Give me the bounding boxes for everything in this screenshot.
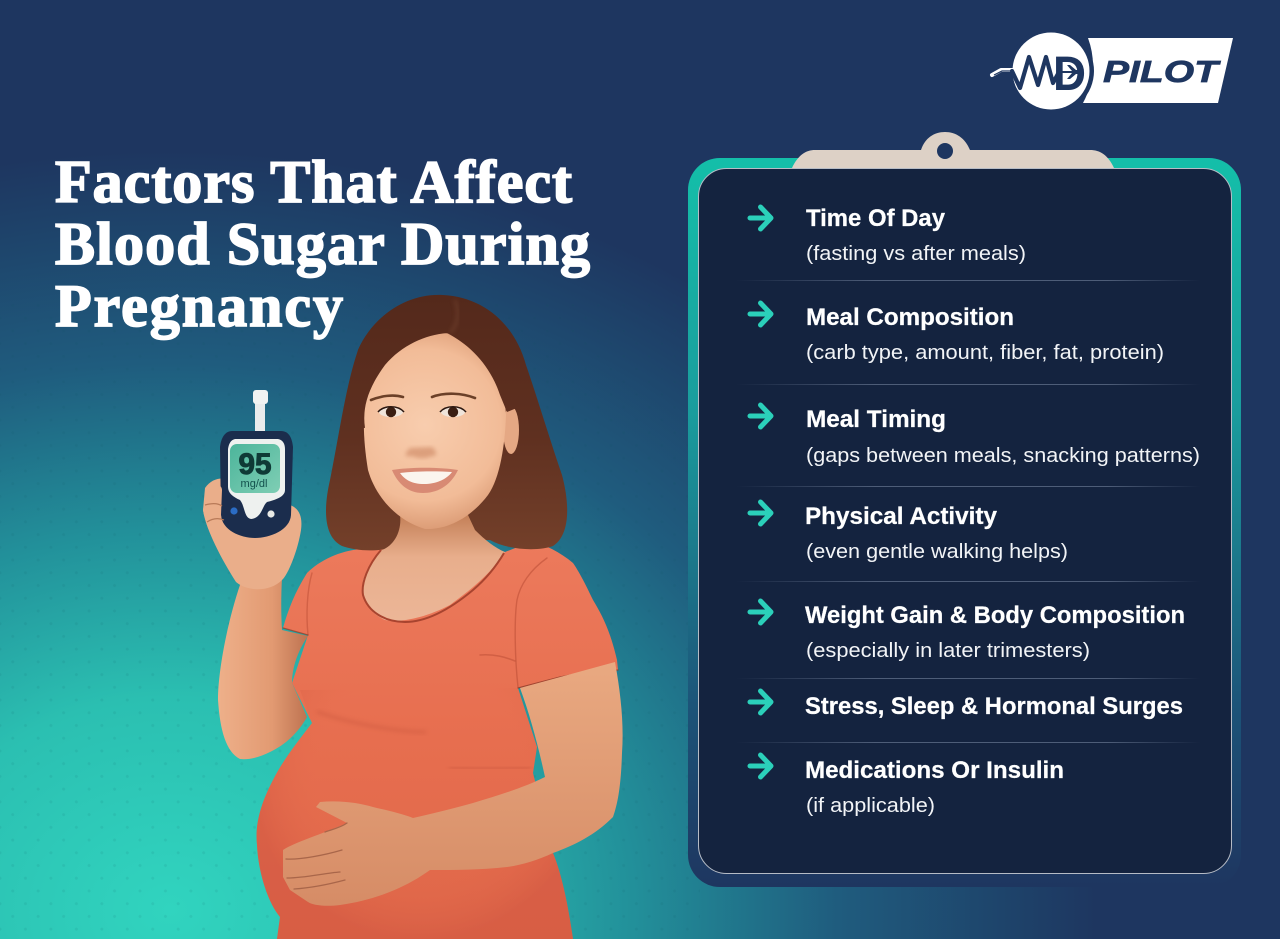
item: physical activity: Physical Activity (805, 503, 998, 530)
face (364, 333, 506, 529)
arrow (750, 601, 771, 623)
shirt folds and seams (283, 558, 618, 769)
reading: 95 (238, 448, 272, 481)
arrow (750, 502, 771, 524)
item: time of day: (fasting vs after meals) (806, 243, 1026, 265)
test strip (255, 400, 265, 433)
nose (406, 447, 436, 458)
eyebrows (371, 394, 475, 400)
item: meal timing: Meal Timing (806, 406, 946, 433)
clipboard sheet (698, 168, 1232, 874)
item: medications (750, 755, 1064, 817)
panel: clipboard (688, 132, 1241, 887)
logo wordmark: PILOT (1103, 54, 1222, 89)
title: Factors That Affect (55, 149, 572, 215)
glucose meter (220, 390, 293, 538)
item: time of day: Time Of Day (806, 205, 946, 232)
neckline (363, 550, 504, 622)
viewer's left arm (218, 578, 308, 759)
meter screen (230, 444, 280, 493)
item: meal timing: (gaps between meals, snacking patterns) (806, 445, 1200, 467)
item: meal composition (750, 303, 1164, 364)
item: weight gain: Weight Gain & Body Composition (805, 602, 1185, 629)
clipboard clip (792, 132, 1114, 168)
ear (503, 406, 519, 454)
item: meal timing (750, 405, 1200, 467)
shirt (257, 541, 618, 939)
item: meal composition: (carb type, amount, fiber, fat, protein) (806, 342, 1164, 364)
logo badge: D (1053, 48, 1086, 101)
item: physical activity (750, 502, 1068, 563)
logo badge (992, 28, 1094, 114)
left hand behind meter (203, 479, 301, 589)
title: Pregnancy (55, 273, 343, 339)
unit: mg/dl (241, 478, 267, 490)
arrow (750, 303, 771, 325)
item: physical activity: (even gentle walking helps) (806, 541, 1068, 563)
item: stress and sleep: Stress, Sleep & Hormonal Surges (805, 693, 1183, 720)
hair back (326, 295, 567, 550)
eyes (378, 407, 466, 417)
logo: MD Pilot (992, 28, 1233, 114)
fingers at meter side (203, 485, 244, 582)
item: medications: Medications Or Insulin (805, 757, 1064, 784)
illustration: pregnant woman holding glucose meter (203, 295, 623, 939)
arrow (750, 755, 771, 777)
item: weight gain: (especially in later trimesters) (806, 640, 1090, 662)
logo banner (1083, 38, 1233, 103)
arrow (750, 405, 771, 427)
title (55, 149, 590, 339)
finger lines (286, 823, 347, 889)
item: time of day (750, 205, 1026, 265)
item: weight gain (750, 601, 1185, 662)
belly shading (257, 688, 573, 939)
clipboard frame (688, 158, 1241, 887)
hair front (348, 297, 524, 428)
mouth (392, 468, 458, 493)
viewer's right arm and hand on belly (283, 662, 623, 906)
meter body (220, 431, 293, 538)
neck and chest (363, 515, 505, 621)
arrow (750, 207, 771, 229)
item: meal composition: Meal Composition (806, 304, 1014, 331)
item: medications: (if applicable) (806, 795, 935, 817)
arrow (750, 691, 771, 713)
title: Blood Sugar During (55, 211, 590, 277)
meter buttons (230, 507, 238, 515)
meter faceplate (228, 439, 285, 519)
hair part (450, 300, 458, 333)
